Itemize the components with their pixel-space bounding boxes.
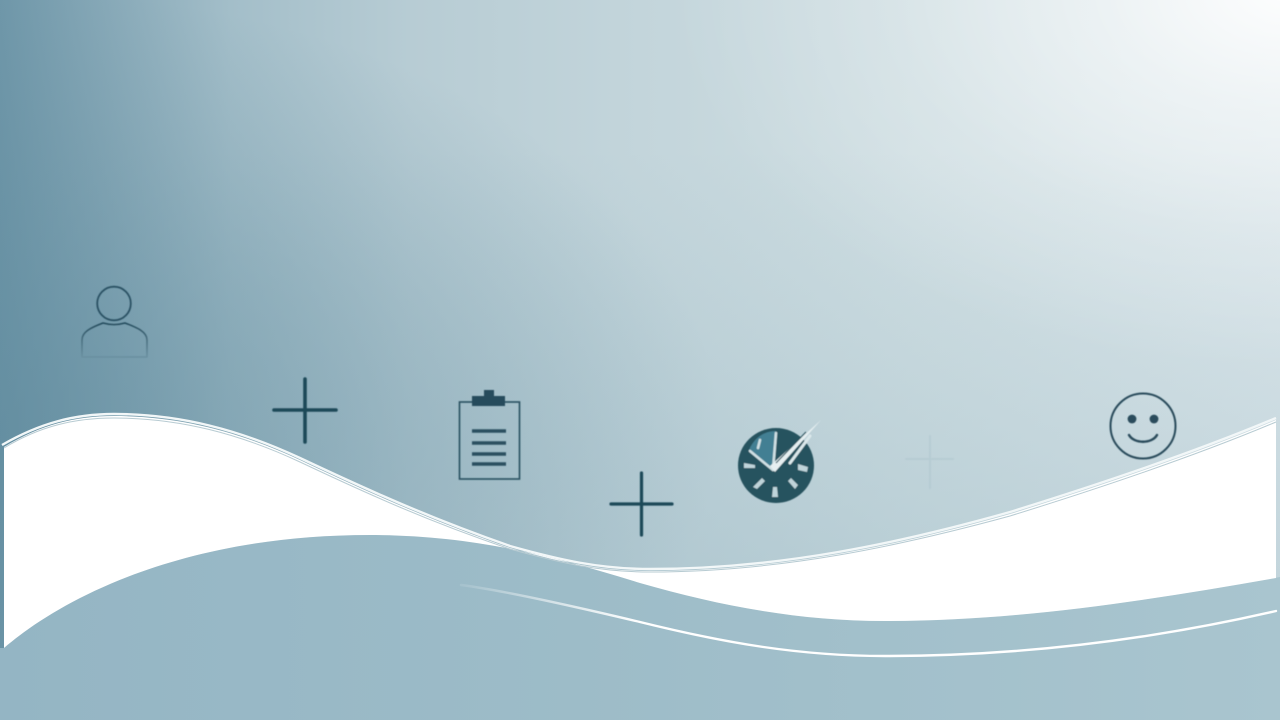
wave edge shadow line: [4, 418, 1276, 572]
icon: smiley face: [1110, 394, 1176, 458]
white wave shape: [2, 414, 1276, 648]
icon: clipboard: [460, 390, 520, 479]
thin white swoosh line: [461, 585, 1276, 656]
wave edge highlight: [2, 414, 1276, 569]
icon: person: [82, 287, 147, 357]
icon: plus one: [274, 379, 336, 442]
icon: clock with checkmark: [738, 420, 821, 503]
icon: faint plus: [906, 436, 953, 488]
clock hands: [750, 433, 776, 470]
lower wave band: [0, 535, 1280, 720]
clock ticks: [744, 463, 808, 497]
clock swept wedge: [749, 431, 776, 470]
icon: plus two: [611, 473, 672, 535]
